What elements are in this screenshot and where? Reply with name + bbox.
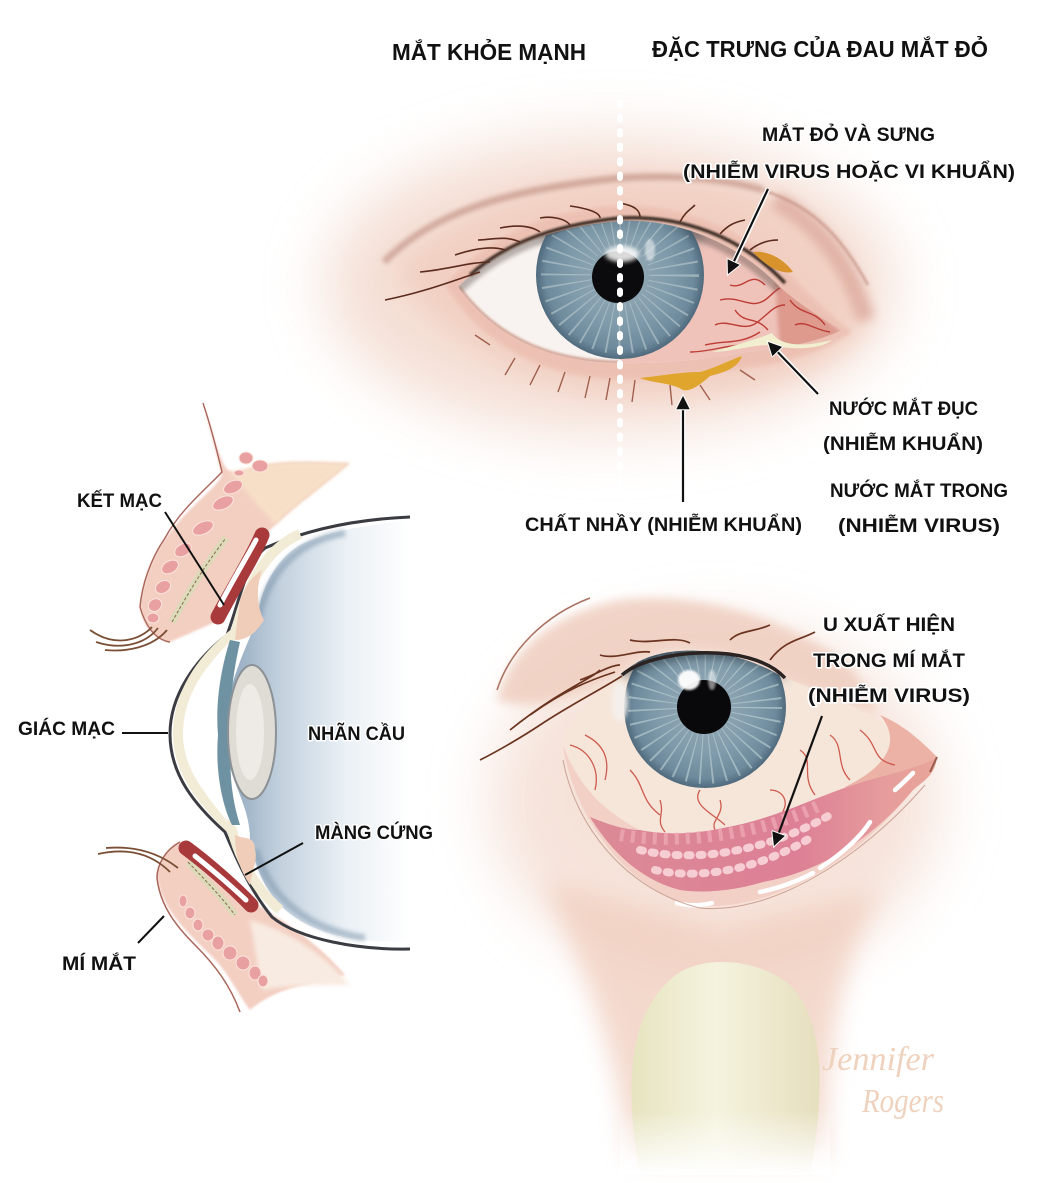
lower glands (179, 895, 268, 987)
discharge (712, 333, 832, 352)
label: lumps in eyelid (808, 614, 970, 707)
lower lashes (475, 335, 755, 405)
arrow: red eye (728, 189, 768, 274)
lens (228, 665, 276, 799)
label: red swollen eye: MẮT ĐỎ VÀ SƯNG (762, 124, 935, 146)
pointer: sclera (245, 843, 303, 875)
iris section (217, 640, 240, 825)
upper lash line (622, 653, 785, 678)
divider: dashed centre line (617, 102, 623, 490)
ciliary body (235, 570, 264, 640)
label: cornea: GIÁC MẠC (18, 718, 115, 740)
label: clear tears: (NHIỄM VIRUS) (838, 515, 1000, 537)
label: sclera: MÀNG CỨNG (315, 822, 433, 844)
illustration: top eye comparison (325, 135, 895, 435)
illustration: eye cross-section (90, 403, 410, 1012)
label: eyelid: MÍ MẮT (62, 953, 136, 975)
upper tarsus (218, 535, 262, 617)
pointer: conjunctiva (165, 512, 224, 605)
label: eyeball: NHÃN CẦU (308, 723, 405, 745)
iris (618, 650, 790, 788)
pointer: cornea (122, 732, 168, 734)
pointer: eyelid (138, 916, 164, 943)
lower lid tissue (157, 842, 345, 1010)
fingertip (631, 962, 820, 1175)
signature (822, 1041, 944, 1120)
arrow: mucus (680, 396, 686, 502)
arrow: lumps (774, 716, 822, 846)
upper lid fold (497, 598, 880, 715)
eyeball interior (225, 520, 410, 941)
heading: healthy eye: MẮT KHỎE MẠNH (392, 37, 586, 65)
lower lid rim (563, 745, 937, 906)
label: lumps in eyelid: TRONG MÍ MẮT (813, 650, 965, 672)
illustration: everted lower eyelid (480, 598, 940, 1175)
label: clear tears (830, 480, 1008, 537)
label: conjunctiva: KẾT MẠC (77, 490, 162, 512)
palpebral conjunctiva (590, 757, 937, 891)
rim highlights (677, 773, 913, 905)
label: red swollen eye: (NHIỄM VIRUS HOẶC VI KHUẨN) (683, 161, 1015, 183)
upper glands (146, 452, 268, 623)
label: cloudy tears (823, 398, 983, 455)
label: lumps in eyelid: U XUẤT HIỆN (823, 614, 955, 636)
heading: conjunctivitis features: ĐẶC TRƯNG CỦA ĐAU MẮT ĐỎ (652, 34, 988, 62)
label: mucus: CHẤT NHẦY (NHIỄM KHUẨN) (525, 514, 802, 536)
upper lash line (470, 218, 785, 283)
lower mucus (640, 356, 742, 390)
label: cloudy tears: (NHIỄM KHUẨN) (823, 433, 983, 455)
pupil (592, 251, 644, 303)
signature: Jennifer (822, 1041, 935, 1078)
pupil (677, 680, 731, 734)
label: lumps in eyelid: (NHIỄM VIRUS) (808, 685, 970, 707)
arrow: cloudy tears (768, 342, 818, 394)
signature: Rogers (861, 1083, 944, 1120)
lashes (90, 627, 178, 872)
iris (536, 220, 708, 359)
lower tarsus (186, 848, 251, 905)
label: clear tears: NƯỚC MẮT TRONG (830, 480, 1008, 502)
sclera and cornea band (170, 517, 410, 949)
upper lid tissue (140, 403, 350, 642)
label: cloudy tears: NƯỚC MẮT ĐỤC (829, 398, 978, 420)
label: red swollen eye (683, 124, 1015, 183)
